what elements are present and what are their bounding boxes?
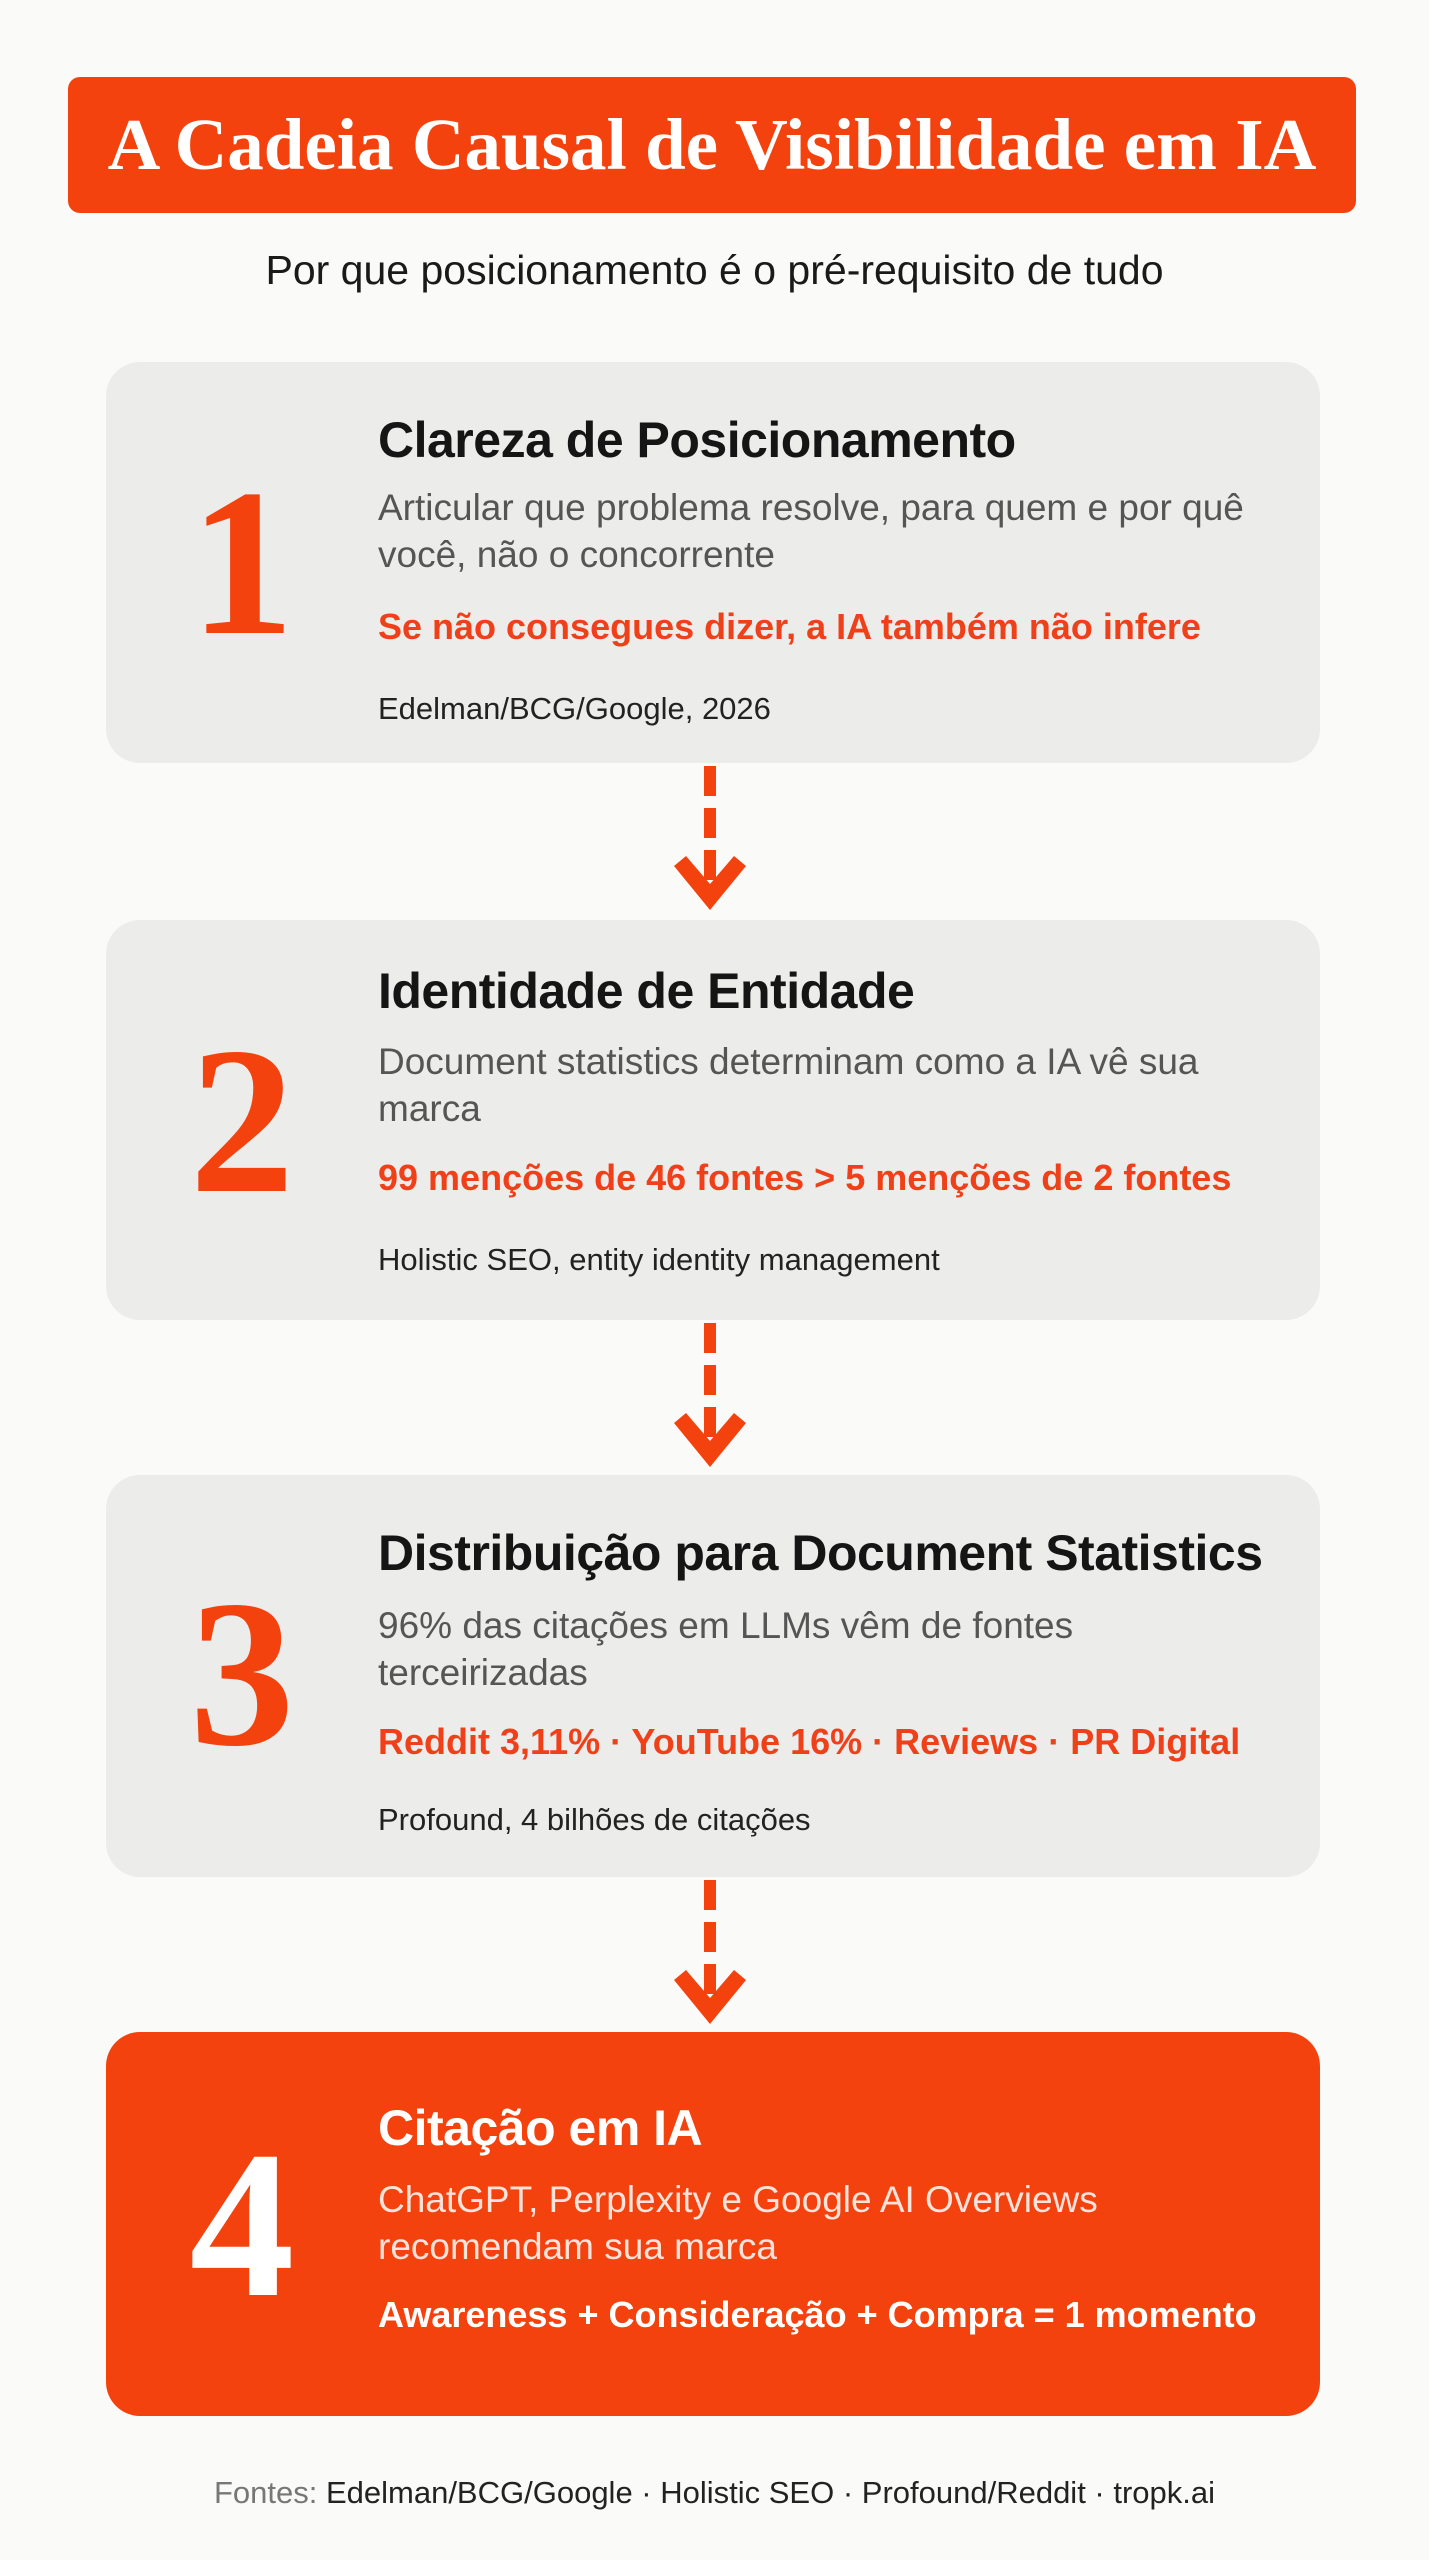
subtitle: Por que posicionamento é o pré-requisito de tudo	[265, 247, 1164, 293]
description 4: recomendam sua marca	[378, 2226, 777, 2267]
panel: step 1	[106, 362, 1320, 763]
highlight 1: Se não consegues dizer, a IA também não infere	[378, 606, 1201, 647]
title	[68, 77, 1356, 213]
arrow 2	[674, 1323, 746, 1467]
highlight 2: 99 menções de 46 fontes > 5 menções de 2 fontes	[378, 1157, 1231, 1198]
description 3: 96% das citações em LLMs vêm de fontes	[378, 1605, 1073, 1646]
description 1: você, não o concorrente	[378, 534, 775, 575]
source 2: Holistic SEO, entity identity management	[378, 1242, 940, 1277]
panel: step 4	[106, 2032, 1320, 2416]
highlight 3: Reddit 3,11% · YouTube 16% · Reviews · PR Digital	[378, 1721, 1240, 1762]
heading 3: Distribuição para Document Statistics	[378, 1525, 1263, 1581]
source 1: Edelman/BCG/Google, 2026	[378, 691, 771, 726]
title: A Cadeia Causal de Visibilidade em IA	[108, 104, 1316, 185]
description 4: ChatGPT, Perplexity e Google AI Overviews	[378, 2179, 1098, 2220]
arrow 3	[674, 1880, 746, 2024]
heading 4: Citação em IA	[378, 2100, 702, 2156]
description 1: Articular que problema resolve, para quem e por quê	[378, 487, 1244, 528]
description 3: terceirizadas	[378, 1652, 588, 1693]
description 1	[378, 487, 1244, 575]
number 3: 3	[190, 1558, 294, 1790]
heading 1: Clareza de Posicionamento	[378, 412, 1016, 468]
source 3: Profound, 4 bilhões de citações	[378, 1802, 811, 1837]
footer sources: Fontes: Edelman/BCG/Google · Holistic SEO · Profound/Reddit · tropk.ai	[214, 2475, 1215, 2510]
highlight 4: Awareness + Consideração + Compra = 1 momento	[378, 2294, 1257, 2335]
heading 2: Identidade de Entidade	[378, 963, 914, 1019]
arrow 1	[674, 766, 746, 910]
description 2: marca	[378, 1088, 481, 1129]
number 2: 2	[190, 1005, 294, 1237]
panel: step 2	[106, 920, 1320, 1320]
panel: step 3	[106, 1475, 1320, 1877]
description 2: Document statistics determinam como a IA vê sua	[378, 1041, 1199, 1082]
description 3	[378, 1605, 1073, 1693]
number 4: 4	[190, 2109, 294, 2341]
description 4	[378, 2179, 1098, 2267]
description 2	[378, 1041, 1199, 1129]
number 1: 1	[190, 447, 294, 679]
